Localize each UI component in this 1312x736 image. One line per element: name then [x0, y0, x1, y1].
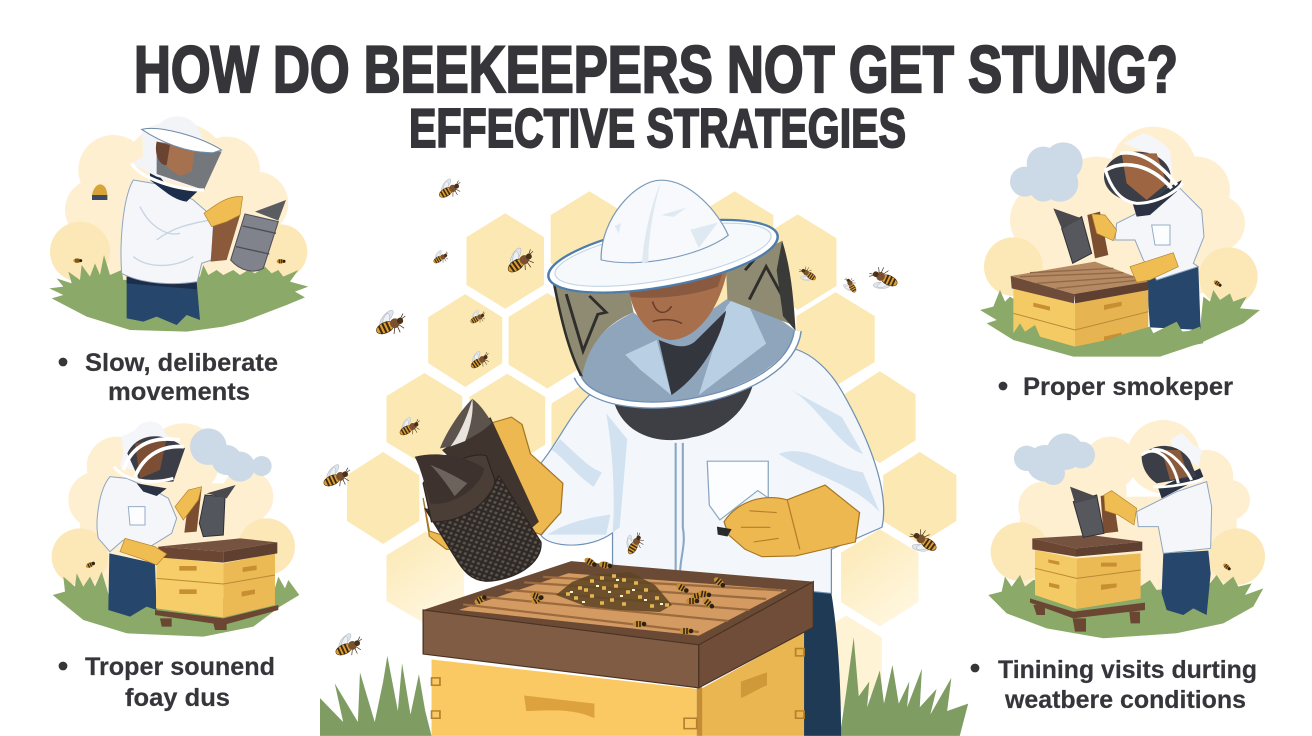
small icon: [92, 184, 107, 200]
grass: [49, 255, 308, 332]
grass: [320, 637, 968, 736]
hood: [1170, 433, 1202, 467]
hat crown: [601, 180, 728, 263]
gloves: [1092, 214, 1117, 241]
hive frames: [459, 573, 787, 636]
pocket: [707, 461, 768, 520]
zipper: [676, 443, 684, 577]
suit: [97, 477, 177, 552]
left glove: [423, 417, 563, 549]
vignette: beekeeper beside hive: [52, 422, 299, 637]
face: [629, 270, 727, 340]
trousers: [804, 590, 841, 736]
trousers: [108, 553, 157, 617]
vignette: smoker over hive: [980, 127, 1260, 357]
bellows: [1101, 493, 1118, 533]
caption: Tinining visits durting: [998, 656, 1257, 684]
title: [134, 32, 1178, 159]
collar: [1158, 468, 1203, 498]
bullet: [59, 662, 67, 670]
panel: central illustration: [318, 173, 968, 736]
glove: [204, 196, 243, 227]
panel: timing visits: [971, 420, 1265, 714]
hive box: [432, 660, 697, 736]
bellows: [1087, 212, 1108, 258]
suit shading: [547, 388, 880, 535]
background cloud: [1010, 127, 1245, 293]
smoker: [415, 399, 541, 581]
background cloud: [1018, 420, 1250, 597]
vignette: beekeeper with smoker: [49, 116, 308, 332]
hat brim: [541, 206, 785, 307]
smoker: [231, 214, 278, 271]
hive: [423, 561, 813, 736]
gloves: [175, 487, 202, 520]
grass: [53, 572, 299, 637]
bullet: [59, 358, 67, 366]
veil interior: [579, 292, 796, 402]
caption: Slow, deliberate: [85, 349, 278, 377]
vignette: beekeeper at hive with smoke: [988, 420, 1265, 638]
trousers: [1147, 267, 1201, 330]
hive: [1013, 288, 1075, 347]
hive rim: [423, 561, 813, 645]
panel: slow movements: [49, 116, 308, 406]
hive: [1035, 550, 1077, 609]
bullet: [971, 664, 979, 672]
hood: [120, 422, 183, 480]
veil hoop: [578, 331, 798, 405]
caption line 2: weatbere conditions: [1004, 686, 1246, 714]
caption line 2: movements: [108, 378, 250, 406]
collar: [150, 163, 197, 202]
collar: [1132, 180, 1182, 217]
shirt collar: [625, 289, 766, 395]
smoke: [1014, 433, 1095, 485]
suit: [121, 180, 240, 284]
veil: [554, 241, 794, 377]
caption line 2: foay dus: [125, 684, 230, 712]
panel: foay dus: [52, 422, 299, 712]
honeycomb background: [347, 191, 956, 713]
beekeeper: [423, 180, 884, 736]
smoke: [190, 428, 272, 482]
hood: [132, 116, 222, 190]
glove: [1104, 491, 1137, 525]
caption: Troper sounend: [85, 653, 275, 681]
bullet: [999, 382, 1007, 390]
smoker: [199, 495, 225, 537]
hood: [1123, 133, 1173, 177]
right glove: [724, 485, 860, 557]
tool in hand: [717, 527, 732, 536]
bellows: [184, 488, 202, 533]
flying bees: [318, 173, 941, 662]
grass: [980, 290, 1260, 357]
bellows: [211, 213, 241, 262]
smoker: [1062, 217, 1092, 263]
bee cluster on frames: [473, 556, 727, 634]
background cloud: [68, 423, 273, 590]
grass: [988, 575, 1263, 638]
bee suit: [541, 349, 884, 593]
suit: [1115, 188, 1204, 280]
caption: Proper smokeper: [1023, 373, 1233, 401]
collar: [137, 483, 167, 496]
dark collar band: [615, 382, 754, 440]
trousers: [127, 277, 200, 325]
suit: [1137, 482, 1212, 553]
smoker: [1073, 495, 1104, 537]
background cloud: [65, 122, 288, 280]
panel: proper smoker: [980, 127, 1260, 401]
trousers: [1162, 551, 1211, 615]
black t-shirt: [659, 311, 726, 395]
smoke: [1010, 142, 1083, 202]
hive: [156, 557, 223, 617]
subheading: EFFECTIVE STRATEGIES: [409, 97, 906, 159]
foreground grass: [1013, 322, 1203, 352]
